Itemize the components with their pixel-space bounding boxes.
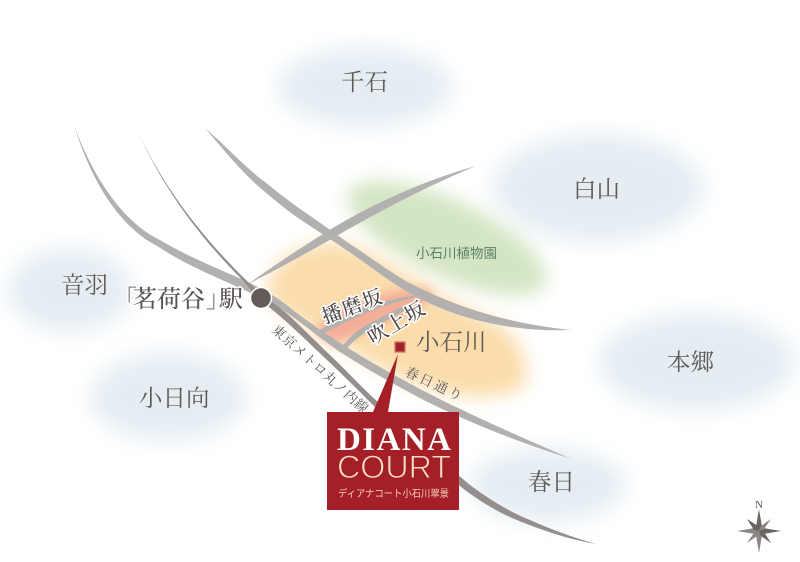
labels: districts [61,69,714,496]
label: 本郷: 本郷 [667,349,714,376]
Koishikawa area [268,243,526,396]
icon: station marker [250,288,272,308]
label: station: 「 [113,286,137,313]
label: 音羽: 音羽 [61,272,108,299]
compass rose [737,499,781,553]
label: station: 」 [206,287,230,313]
label: station: 駅 [218,286,243,313]
label: 小日向: 小日向 [139,385,210,412]
road: north-east branch [248,166,476,284]
pointer [373,354,398,412]
metro line: Tokyo Metro Marunouchi [139,134,596,544]
label: Banshu-zaka: 播磨坂 [319,285,387,329]
Fukiage-zaka slope road [341,295,430,350]
park: Koishikawa Botanical Garden [333,158,561,318]
label: north: N [755,499,763,511]
logo box: Diana Court [327,412,459,510]
roads [74,125,572,459]
label: botanical garden: 小石川植物園 [416,245,497,261]
label: 千石: 千石 [341,69,388,96]
label: 小石川: 小石川 [416,329,486,356]
site marker and pointer [373,342,405,412]
logo: DIANA: DIANA [337,422,451,458]
label: 春日: 春日 [528,469,575,496]
label: Fukiage-zaka: 吹上坂 [364,297,431,349]
icon: compass star [737,509,781,553]
label: Kasuga-dori: 春日通り [403,364,467,405]
label: station: 茗荷谷 [133,286,205,313]
icon: site marker [395,342,405,352]
road: west curve and Kasuga-dori [74,125,572,459]
logo: COURT: COURT [337,449,451,485]
Banshu-zaka slope road [318,294,425,334]
label: 白山: 白山 [573,176,620,203]
logo: Japanese name: ディアナコート小石川翠景 [338,487,449,500]
slope highlight [315,288,431,344]
road: north-west diagonal [205,128,571,330]
label: Marunouchi line: 東京メトロ丸ノ内線 [269,321,372,416]
